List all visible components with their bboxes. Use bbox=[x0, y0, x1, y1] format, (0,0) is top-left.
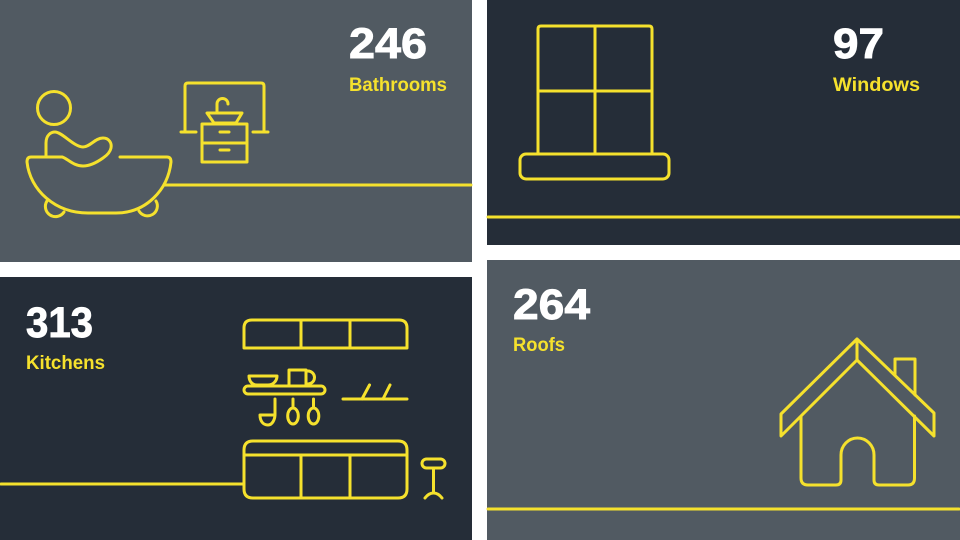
label: Windows: Windows bbox=[833, 75, 920, 96]
panel: kitchens bbox=[0, 277, 472, 540]
label: Bathrooms: Bathrooms bbox=[349, 75, 447, 96]
icon: lower cabinets bbox=[244, 441, 407, 498]
icon: window bbox=[520, 26, 669, 179]
panel: roofs bbox=[487, 260, 960, 540]
number: 246: 246 bbox=[349, 20, 427, 68]
icon: house bbox=[781, 339, 934, 485]
floor line bbox=[165, 184, 471, 186]
icon: upper cabinets bbox=[244, 320, 407, 348]
panel: bathrooms bbox=[0, 0, 472, 262]
icon: person in bathtub bbox=[27, 92, 171, 217]
number: 97: 97 bbox=[833, 20, 884, 68]
label: Roofs: Roofs bbox=[513, 335, 565, 356]
icon: sink and mirror bbox=[181, 83, 268, 162]
number: 264: 264 bbox=[513, 281, 590, 329]
panel: windows bbox=[487, 0, 960, 245]
label: Kitchens: Kitchens bbox=[26, 353, 105, 374]
number: 313: 313 bbox=[26, 299, 93, 347]
floor line bbox=[488, 508, 959, 510]
icon: shelf with bowl, cup and utensils bbox=[244, 370, 325, 425]
icon: rack bbox=[343, 385, 407, 399]
icon: stool bbox=[422, 459, 445, 498]
floor line bbox=[488, 216, 959, 218]
floor line bbox=[1, 482, 244, 486]
